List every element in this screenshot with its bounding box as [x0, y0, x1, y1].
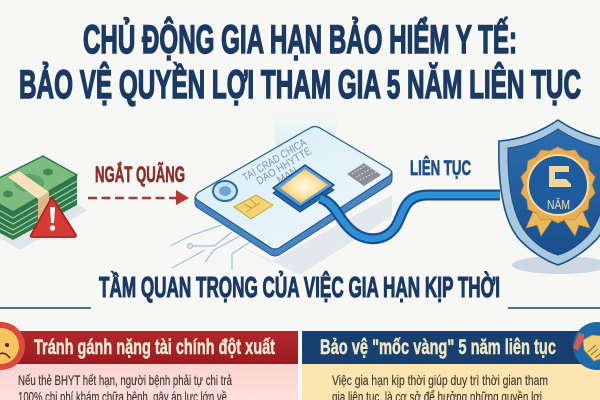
medal	[521, 147, 595, 223]
arrow: dashed red	[88, 190, 189, 205]
processor chip	[273, 165, 334, 212]
card shadow	[205, 195, 392, 275]
icon: money stack with warning	[0, 156, 88, 250]
card text	[241, 136, 319, 201]
gold chip	[234, 195, 273, 219]
panel body text: Nếu thẻ BHYT hết hạn, người bệnh phải tự chi trả	[18, 372, 232, 388]
medal ribbons	[526, 212, 590, 236]
card text: DAO HHYTTE	[254, 145, 314, 187]
panel body text	[332, 372, 548, 400]
QR code	[347, 163, 381, 186]
card text: MAN	[275, 165, 300, 187]
heading rules	[0, 307, 600, 309]
shield badge	[499, 120, 600, 265]
label: liên tục: LIÊN TỤC	[410, 156, 471, 180]
medal: NĂM	[547, 197, 570, 212]
panel header: red banner	[0, 331, 298, 364]
cable	[320, 195, 500, 239]
title	[19, 15, 581, 107]
panel: five-year milestone	[302, 322, 600, 400]
light beam	[272, 115, 338, 180]
health insurance card	[195, 126, 392, 256]
label: ngắt quãng: NGẮT QUÃNG	[95, 162, 185, 187]
icon: warning triangle	[31, 197, 76, 237]
logo seal	[213, 181, 237, 201]
panel heading: Tránh gánh nặng tài chính đột xuất	[34, 336, 275, 359]
panel: financial burden	[0, 322, 298, 400]
shield shadow	[512, 256, 600, 274]
circuit lines	[170, 225, 250, 270]
card text: TAI CRAD CHICA	[241, 136, 309, 184]
icon: sad face	[0, 322, 25, 370]
panel body text	[18, 372, 232, 400]
panel header: navy banner	[302, 331, 600, 364]
icon: handshake	[573, 322, 600, 370]
